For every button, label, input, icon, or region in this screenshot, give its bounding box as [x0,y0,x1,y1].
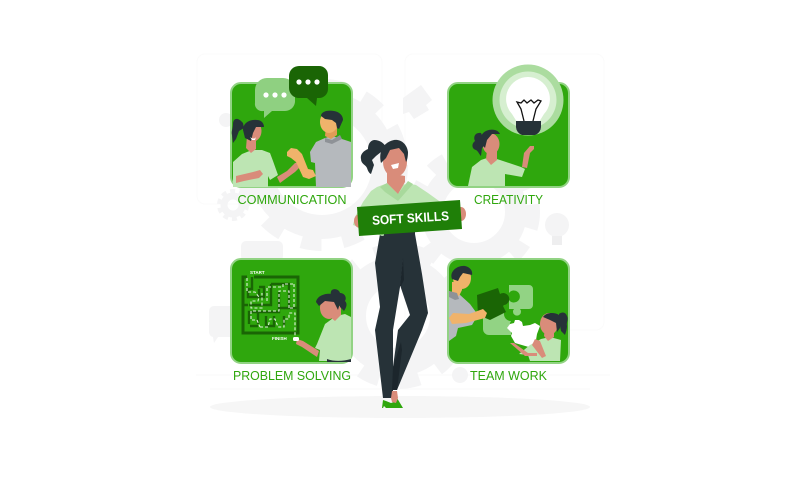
icon: dark speech bubble [289,66,328,106]
man with puzzle [449,266,487,341]
maze label: finish: FINISH [272,336,287,341]
shirt [353,184,453,236]
background decorations [196,54,610,389]
right leg [392,234,428,390]
sign hands [354,214,366,228]
woman with puzzle [510,313,568,361]
panel: communication [231,66,352,187]
central woman [353,140,466,408]
label: team work: TEAM WORK [470,368,547,383]
label: communication: COMMUNICATION [238,192,346,207]
woman with raised hand [468,130,534,186]
panel: team work [448,259,569,363]
label: creativity: CREATIVITY [474,192,543,207]
belt [384,232,415,236]
sign text: SOFT SKILLS [372,208,450,228]
puzzle pieces [477,285,540,348]
maze [243,270,298,341]
label: problem solving: PROBLEM SOLVING [233,368,351,383]
icon: light bulb [492,64,564,136]
leg shadow [392,258,404,390]
panel: creativity [448,64,569,187]
woman drawing [293,289,351,362]
sign [357,200,462,236]
woman talking [232,119,301,187]
maze label: start: START [250,270,265,275]
ground shadow [210,396,590,418]
hair [380,140,408,163]
panel: problem solving [231,259,352,363]
man talking [287,111,351,187]
head [383,147,407,177]
icon: light speech bubble [255,78,295,118]
left leg [375,234,404,398]
shoes [382,398,403,408]
